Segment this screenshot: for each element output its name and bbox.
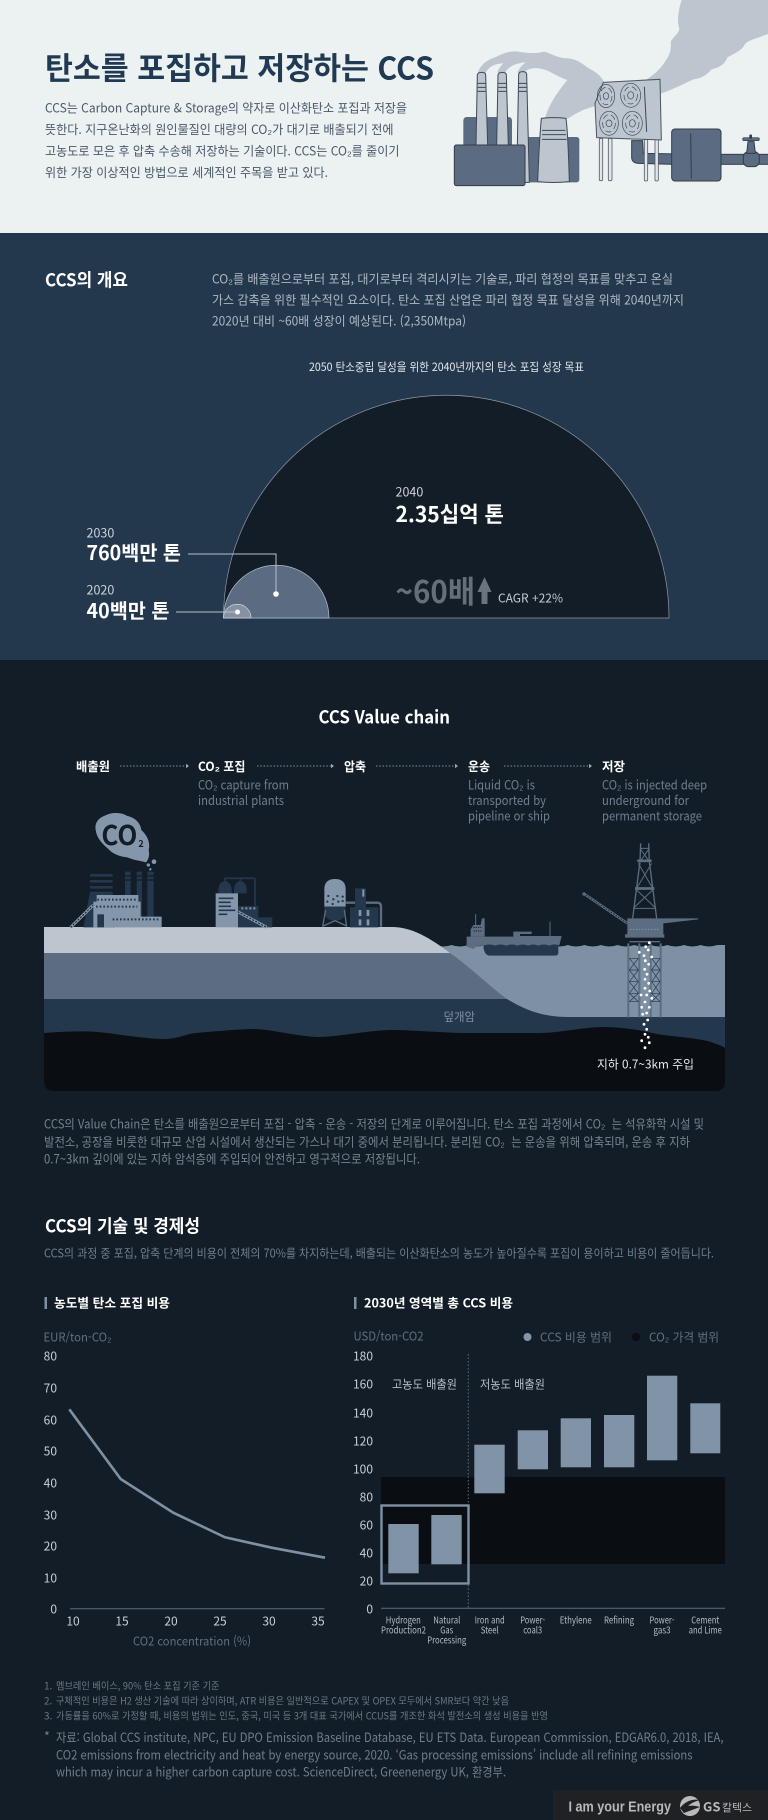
step: storage: underground for [602,790,689,809]
y axis labels: 60 [360,1516,373,1533]
label: 2030 value: 760백만 톤 [86,537,181,566]
x axis labels: 35 [311,1612,325,1629]
CO2 injection bubbles [638,941,653,1049]
footnotes: 1. [44,1678,53,1693]
label: 2020 value: 2020 [86,580,114,598]
y axis labels: 30 [44,1506,57,1523]
label: caprock: 덮개암 [444,1008,475,1025]
label: 2030 value [86,522,181,566]
callout: 60x growth: ~60배 [396,567,475,612]
legend: CO₂ 가격 범위 [649,1328,719,1345]
highlight box [382,1506,468,1584]
step: storage [602,756,707,824]
label: injection depth: 지하 0.7~3km 주입 [597,1056,694,1072]
sector labels: coal3 [523,1622,542,1636]
sector labels: and Lime [689,1622,722,1636]
label: 2040 value: 2.35십억 톤 [396,498,504,529]
y axis labels: 80 [44,1347,57,1364]
heading: technology and economics: CCS의 기술 및 경제성 [45,1212,200,1238]
footnotes: 2. [44,1693,53,1708]
y axis labels: 40 [44,1474,57,1491]
y axis labels: 160 [353,1375,373,1392]
value chain description text: 발전소, 공장을 비롯한 대규모 산업 시설에서 생산되는 가스나 대기 중에서 분리됩니다. 분리된 CO₂ 는 운송을 위해 압축되며, 운송 후 지하 [44,1131,690,1150]
step: transport: transported by [468,790,546,809]
y axis labels: 20 [360,1572,373,1589]
y axis labels: 80 [360,1488,373,1505]
step: transport: Liquid CO₂ is [468,774,535,794]
step: storage: CO₂ is injected deep [602,774,707,794]
x axis title: CO2 concentration (%) [133,1632,251,1649]
step: capture: CO₂ capture from [198,774,289,794]
arrow [376,764,458,768]
chart: capture cost by concentration [44,1293,325,1649]
sector labels: Production2 [381,1622,426,1636]
chart: nested semicircles of capture targets [86,395,669,624]
label: 2020 value: 40백만 톤 [86,595,170,624]
x axis labels: 25 [213,1612,227,1629]
heading: CCS overview: CCS의 개요 [45,266,128,292]
brand footer: GS Caltex: GS [703,1796,720,1816]
callout: 60x growth [396,567,563,612]
y axis labels: 120 [353,1432,373,1449]
sources: * [44,1726,50,1745]
sector labels: Gas [440,1622,454,1636]
semicircle: 2030 [224,565,329,618]
legend [524,1328,719,1345]
icon: CO2 cloud and power plant [71,813,162,927]
panel: intro header [0,0,768,233]
layer: mid strata [44,953,507,999]
title: 탄소를 포집하고 저장하는 CCS [45,44,434,88]
cost line [69,1409,325,1558]
y axis unit: EUR/ton-CO₂ [44,1328,112,1345]
sources: which may incur a higher carbon capture cost. ScienceDirect, Greenenergy UK, 환경부. [56,1762,506,1780]
label: 2030 value: 2030 [86,522,114,542]
y axis labels: 40 [360,1544,373,1561]
brand footer: GS Caltex [553,1790,768,1820]
brand footer: GS Caltex: 칼텍스 [722,1800,752,1815]
connector: 2020 [176,610,240,614]
water [435,945,725,1025]
layer: deep rock [44,1027,725,1091]
sector labels: gas3 [654,1622,670,1636]
cost range bars [388,1376,720,1573]
y axis labels [44,1347,57,1617]
intro text block [45,98,407,181]
footnotes: 멤브레인 베이스, 90% 탄소 포집 기준 기준 [56,1678,220,1693]
intro text block: 뜻한다. 지구온난화의 원인물질인 대량의 CO₂가 대기로 배출되기 전에 [45,119,394,138]
y axis labels: 10 [44,1569,57,1586]
value chain description text [44,1113,704,1167]
semicircle: 2040 [224,395,669,618]
arrow [257,764,334,768]
diagram: geological cross-section [44,927,725,1091]
legend: CCS 비용 범위 [540,1328,612,1345]
icon: ship [467,914,562,956]
footnotes [44,1678,548,1723]
intro text block: 고농도로 모은 후 압축 수송해 저장하는 기술이다. CCS는 CO₂를 줄이기 [45,140,400,160]
icon: CO2 cloud [95,813,156,870]
arrow [504,764,592,768]
step: emission source: 배출원 [76,756,110,775]
overview text block [212,268,684,330]
chart heading: 농도별 탄소 포집 비용 [54,1293,170,1312]
footnotes: 구체적인 비용은 H2 생산 기술에 따라 상이하며, ATR 비용은 일반적으로 CAPEX 및 OPEX 모두에서 SMR보다 약간 낮음 [56,1693,509,1708]
icon: capture plant [216,878,272,927]
x axis labels: 20 [164,1612,178,1629]
label: low concentration: 저농도 배출원 [480,1375,545,1392]
icon: CO2 cloud: 2 [138,837,144,850]
label: 2020 value [86,580,170,624]
icon: GS logo [680,1796,700,1816]
label: 2040 value: 2040 [396,482,423,500]
intro text block: 위한 가장 이상적인 방법으로 세계적인 주목을 받고 있다. [45,162,328,181]
sector labels: Hydrogen [386,1612,421,1626]
y axis unit: USD/ton-CO2 [354,1327,424,1344]
x axis labels: 30 [262,1612,276,1629]
intro text block: CCS는 Carbon Capture & Storage의 약자로 이산화탄소 포집과 저장을 [45,98,407,116]
sector labels: Cement [691,1612,720,1626]
sector labels: Steel [481,1622,499,1636]
heading: CCS Value chain: CCS Value chain [318,704,450,730]
layer: top soil [44,927,450,953]
y axis labels: 70 [44,1379,57,1396]
CO2 price range band [381,1477,725,1564]
callout: 60x growth: CAGR +22% [498,590,563,606]
illustration: plant with smoke and capture unit [454,0,768,186]
chart title: 2050 탄소중립 달성을 위한 2040년까지의 탄소 포집 성장 목표 [309,359,584,375]
overview text block: 가스 감축을 위한 필수적인 요소이다. 탄소 포집 산업은 파리 협정 목표 달성을 위해 2040년까지 [212,290,684,308]
sector labels: Processing [427,1632,467,1646]
sector labels: Refining [604,1612,635,1626]
y axis labels: 180 [353,1347,373,1364]
y axis labels: 0 [50,1600,57,1617]
overview text block: CO₂를 배출원으로부터 포집, 대기로부터 격리시키는 기술로, 파리 협정의 목표를 맞추고 온실 [212,268,673,288]
panel: CCS value chain and economics [0,660,768,1820]
sources [44,1726,724,1780]
chart: 2030 total CCS cost by sector [353,1293,725,1646]
chart heading: 2030년 영역별 총 CCS 비용 [364,1293,513,1312]
icon: compression plant [323,879,381,927]
step: capture [198,756,289,809]
label: high concentration: 고농도 배출원 [392,1375,457,1392]
y axis labels: 20 [44,1537,57,1554]
x axis labels: 15 [115,1612,129,1629]
y axis labels: 0 [366,1600,373,1617]
x axis labels [66,1612,325,1629]
step: transport: pipeline or ship [468,806,550,824]
sources: CO2 emissions from electricity and heat by energy source, 2020. ‘Gas processing emissions’ include all refining emissions [56,1744,693,1764]
footnotes: 가동률을 60%로 가정할 때, 비용의 범위는 인도, 중국, 미국 등 3개 대표 국가에서 CCUS를 개조한 화석 발전소의 생성 비용을 반영 [56,1708,548,1723]
footnotes: 3. [44,1708,53,1723]
step: capture: industrial plants [198,790,284,809]
arrow [120,764,189,768]
step: transport [468,756,550,824]
y axis labels: 50 [44,1442,57,1459]
step: storage: permanent storage [602,806,702,824]
step: compression: 압축 [344,756,366,775]
value chain steps [76,756,707,824]
icon: CO2 cloud: CO [101,813,137,853]
label: 2040 value [396,482,504,529]
y axis labels: 100 [353,1460,373,1477]
connector: 2030 [188,554,279,597]
panel: CCS overview [0,233,768,660]
economics description: CCS의 과정 중 포집, 압축 단계의 비용이 전체의 70%를 차지하는데, 배출되는 이산화탄소의 농도가 높아질수록 포집이 용이하고 비용이 줄어듭니다. [44,1244,714,1261]
y axis labels: 140 [353,1404,373,1421]
step: transport: 운송 [468,756,490,775]
value chain description text: CCS의 Value Chain은 탄소를 배출원으로부터 포집 - 압축 - 운송 - 저장의 단계로 이루어집니다. 탄소 포집 과정에서 CO₂ 는 석유화학 시설 및 [44,1113,704,1132]
step: storage: 저장 [602,756,625,775]
icon: offshore rig [582,843,698,1017]
sector labels: Natural [433,1612,461,1626]
y axis labels: 60 [44,1411,57,1428]
sector labels [381,1612,722,1646]
sector labels: Power- [650,1612,674,1626]
step: capture: CO₂ 포집 [198,756,246,775]
overview text block: 2020년 대비 ~60배 성장이 예상된다. (2,350Mtpa) [212,310,466,330]
sector labels: Ethylene [560,1612,592,1626]
brand footer: GS Caltex: I am your Energy [568,1800,671,1816]
value chain description text: 0.7~3km 깊이에 있는 지하 암석층에 주입되어 안전하고 영구적으로 저장됩니다. [44,1148,420,1167]
sector labels: Power- [520,1612,545,1626]
y axis labels [353,1347,373,1617]
layer: caprock [44,999,725,1060]
semicircle: 2020 [224,604,251,618]
sector labels: Iron and [475,1612,505,1626]
x axis labels: 10 [66,1612,80,1629]
